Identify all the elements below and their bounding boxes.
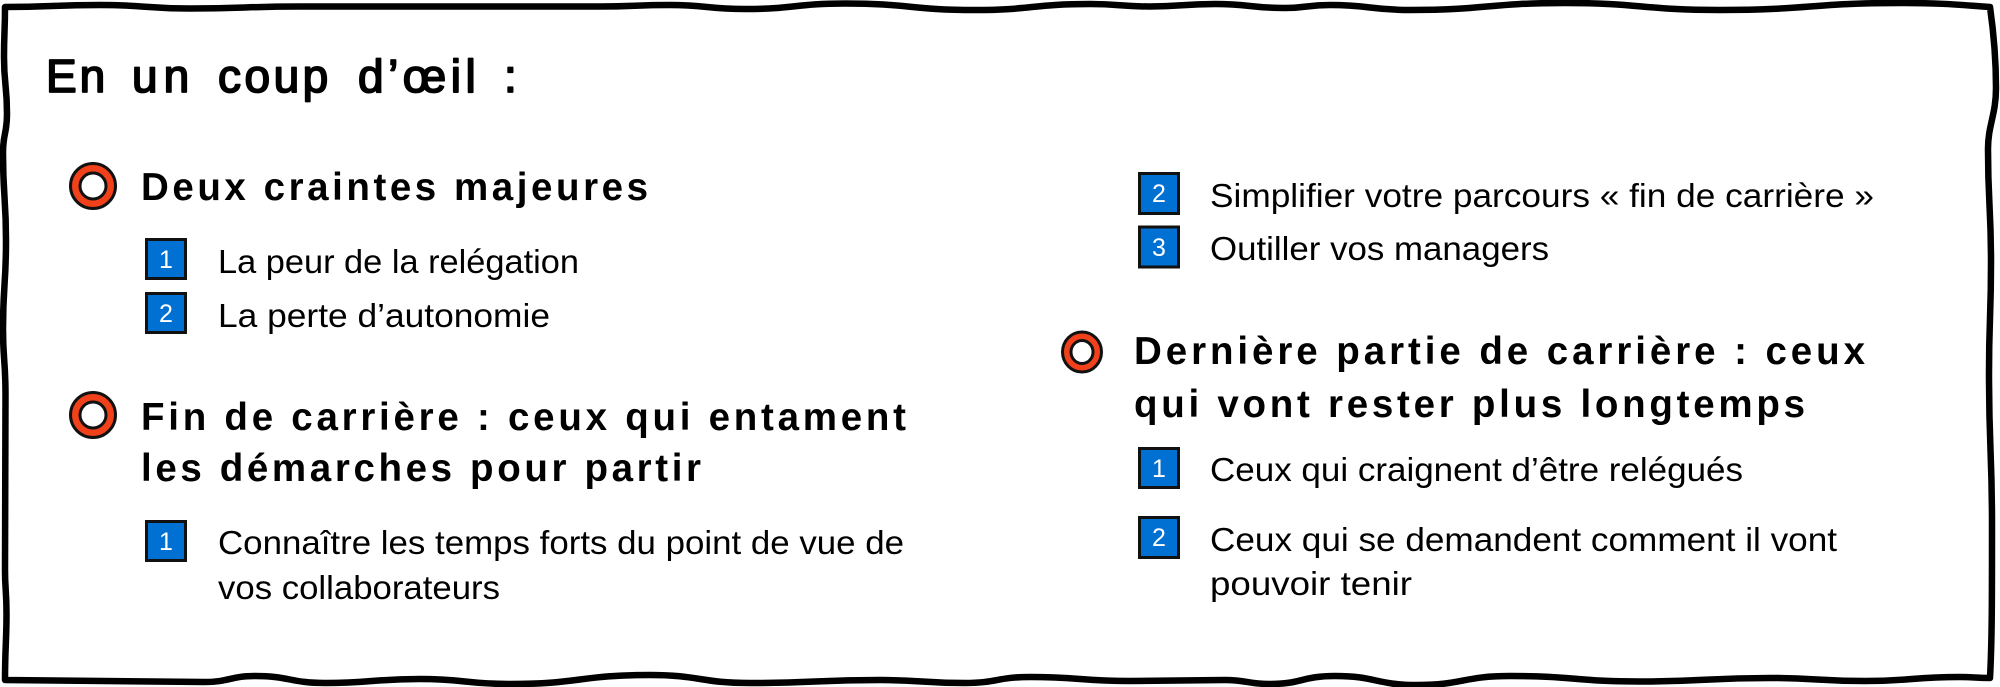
icon: red ring bullet [1062, 332, 1102, 372]
item 2: pouvoir tenir [1210, 565, 1412, 602]
heading: Fin de carrière : ceux qui entament [141, 396, 906, 439]
icon: red ring bullet [70, 164, 116, 208]
item 1 [146, 522, 904, 606]
item 1: vos collaborateurs [218, 569, 500, 606]
item 3: 3 [1152, 234, 1166, 262]
item 3: Outiller vos managers [1210, 230, 1549, 267]
item 1: Ceux qui craignent d’être relégués [1210, 451, 1743, 488]
title: coup [218, 50, 332, 102]
heading: Dernière partie de carrière : ceux [1134, 330, 1866, 373]
item 1: La peur de la relégation [218, 243, 579, 280]
item 1: 1 [1152, 455, 1166, 483]
item 2 [1140, 518, 1837, 602]
section: continued list [1140, 174, 1874, 267]
heading: les démarches pour partir [141, 447, 701, 490]
heading: qui vont rester plus longtemps [1134, 383, 1805, 426]
section: dernière partie de carrière [1062, 330, 1866, 602]
title: : [504, 50, 517, 102]
heading: Deux craintes majeures [141, 166, 648, 209]
item 2: Simplifier votre parcours « fin de carrière » [1210, 177, 1874, 214]
icon: red ring bullet [70, 392, 116, 438]
item 1: 1 [159, 246, 173, 274]
title: un [132, 50, 195, 102]
item 2: La perte d’autonomie [218, 297, 550, 334]
item 2: 2 [1152, 524, 1166, 552]
section: deux craintes majeures [70, 164, 648, 334]
item 2: 2 [159, 300, 173, 328]
item 1: Connaître les temps forts du point de vue de [218, 524, 904, 561]
section: fin de carrière [70, 392, 906, 606]
item 2: 2 [1152, 180, 1166, 208]
item 2: Ceux qui se demandent comment il vont [1210, 521, 1837, 558]
heading [1134, 330, 1866, 426]
heading [141, 396, 906, 490]
title: En [46, 50, 108, 102]
item 1: 1 [159, 528, 173, 556]
title: d’œil [358, 50, 480, 102]
